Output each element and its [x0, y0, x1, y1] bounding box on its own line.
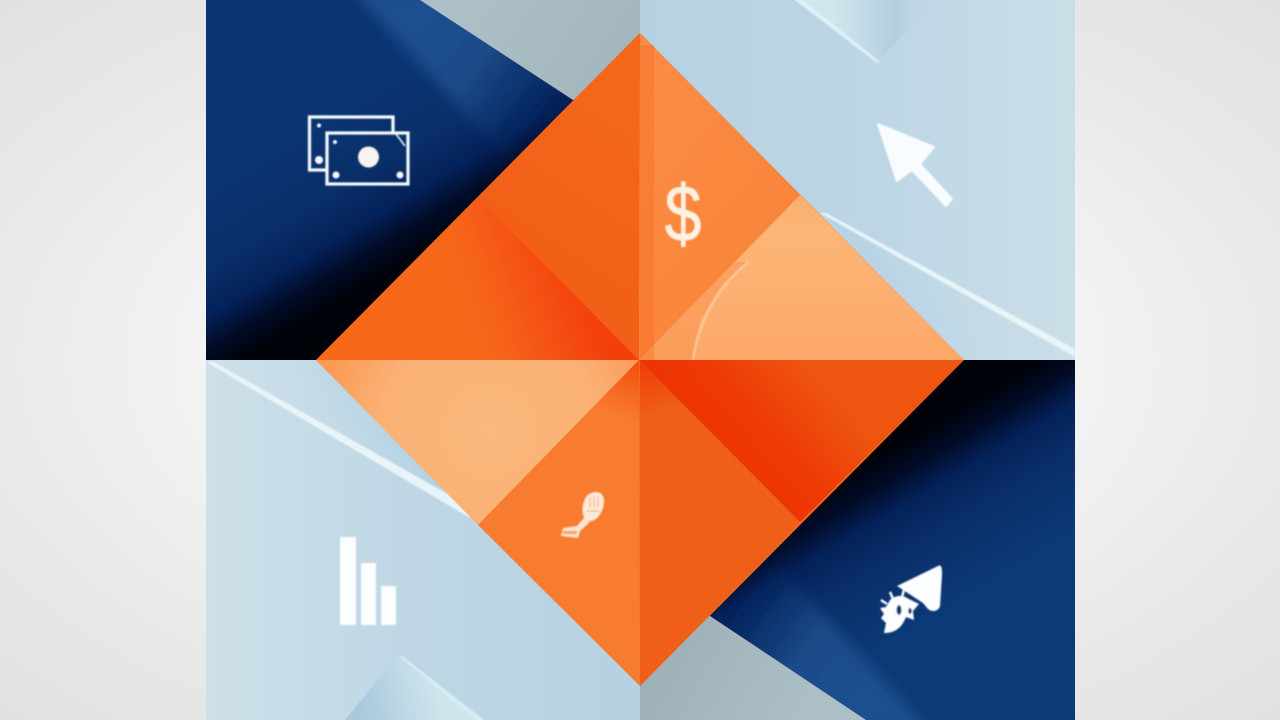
segment: top-right lower peach: [639, 195, 964, 360]
segment: bottom-left lower: [478, 360, 640, 686]
segment: top-right upper: [639, 33, 800, 360]
panel: bottom centre gray fold: [640, 603, 866, 720]
icon: bar chart: [340, 537, 396, 625]
segment: top-left lower: [316, 197, 639, 360]
panel: bottom-right navy: [710, 360, 1075, 720]
segment: bottom-right lower: [639, 360, 800, 686]
icon: arrow cursor: [878, 124, 952, 206]
panel: bottom-left light blue: [206, 360, 640, 720]
panel: top centre gray fold: [420, 0, 640, 118]
icon: banknotes: [310, 117, 408, 184]
orange diamond: [316, 33, 964, 686]
segment: bottom-right upper: [639, 360, 964, 522]
panel: top-right light blue: [640, 0, 1075, 360]
icon: hand: [561, 492, 604, 538]
icon: dollar sign: $: [664, 169, 702, 258]
icon: megaphone and bug: [880, 566, 942, 633]
segment: top-left upper: [478, 33, 640, 360]
segment: bottom-left upper peach: [316, 360, 639, 525]
panel: top-left navy: [206, 0, 574, 360]
